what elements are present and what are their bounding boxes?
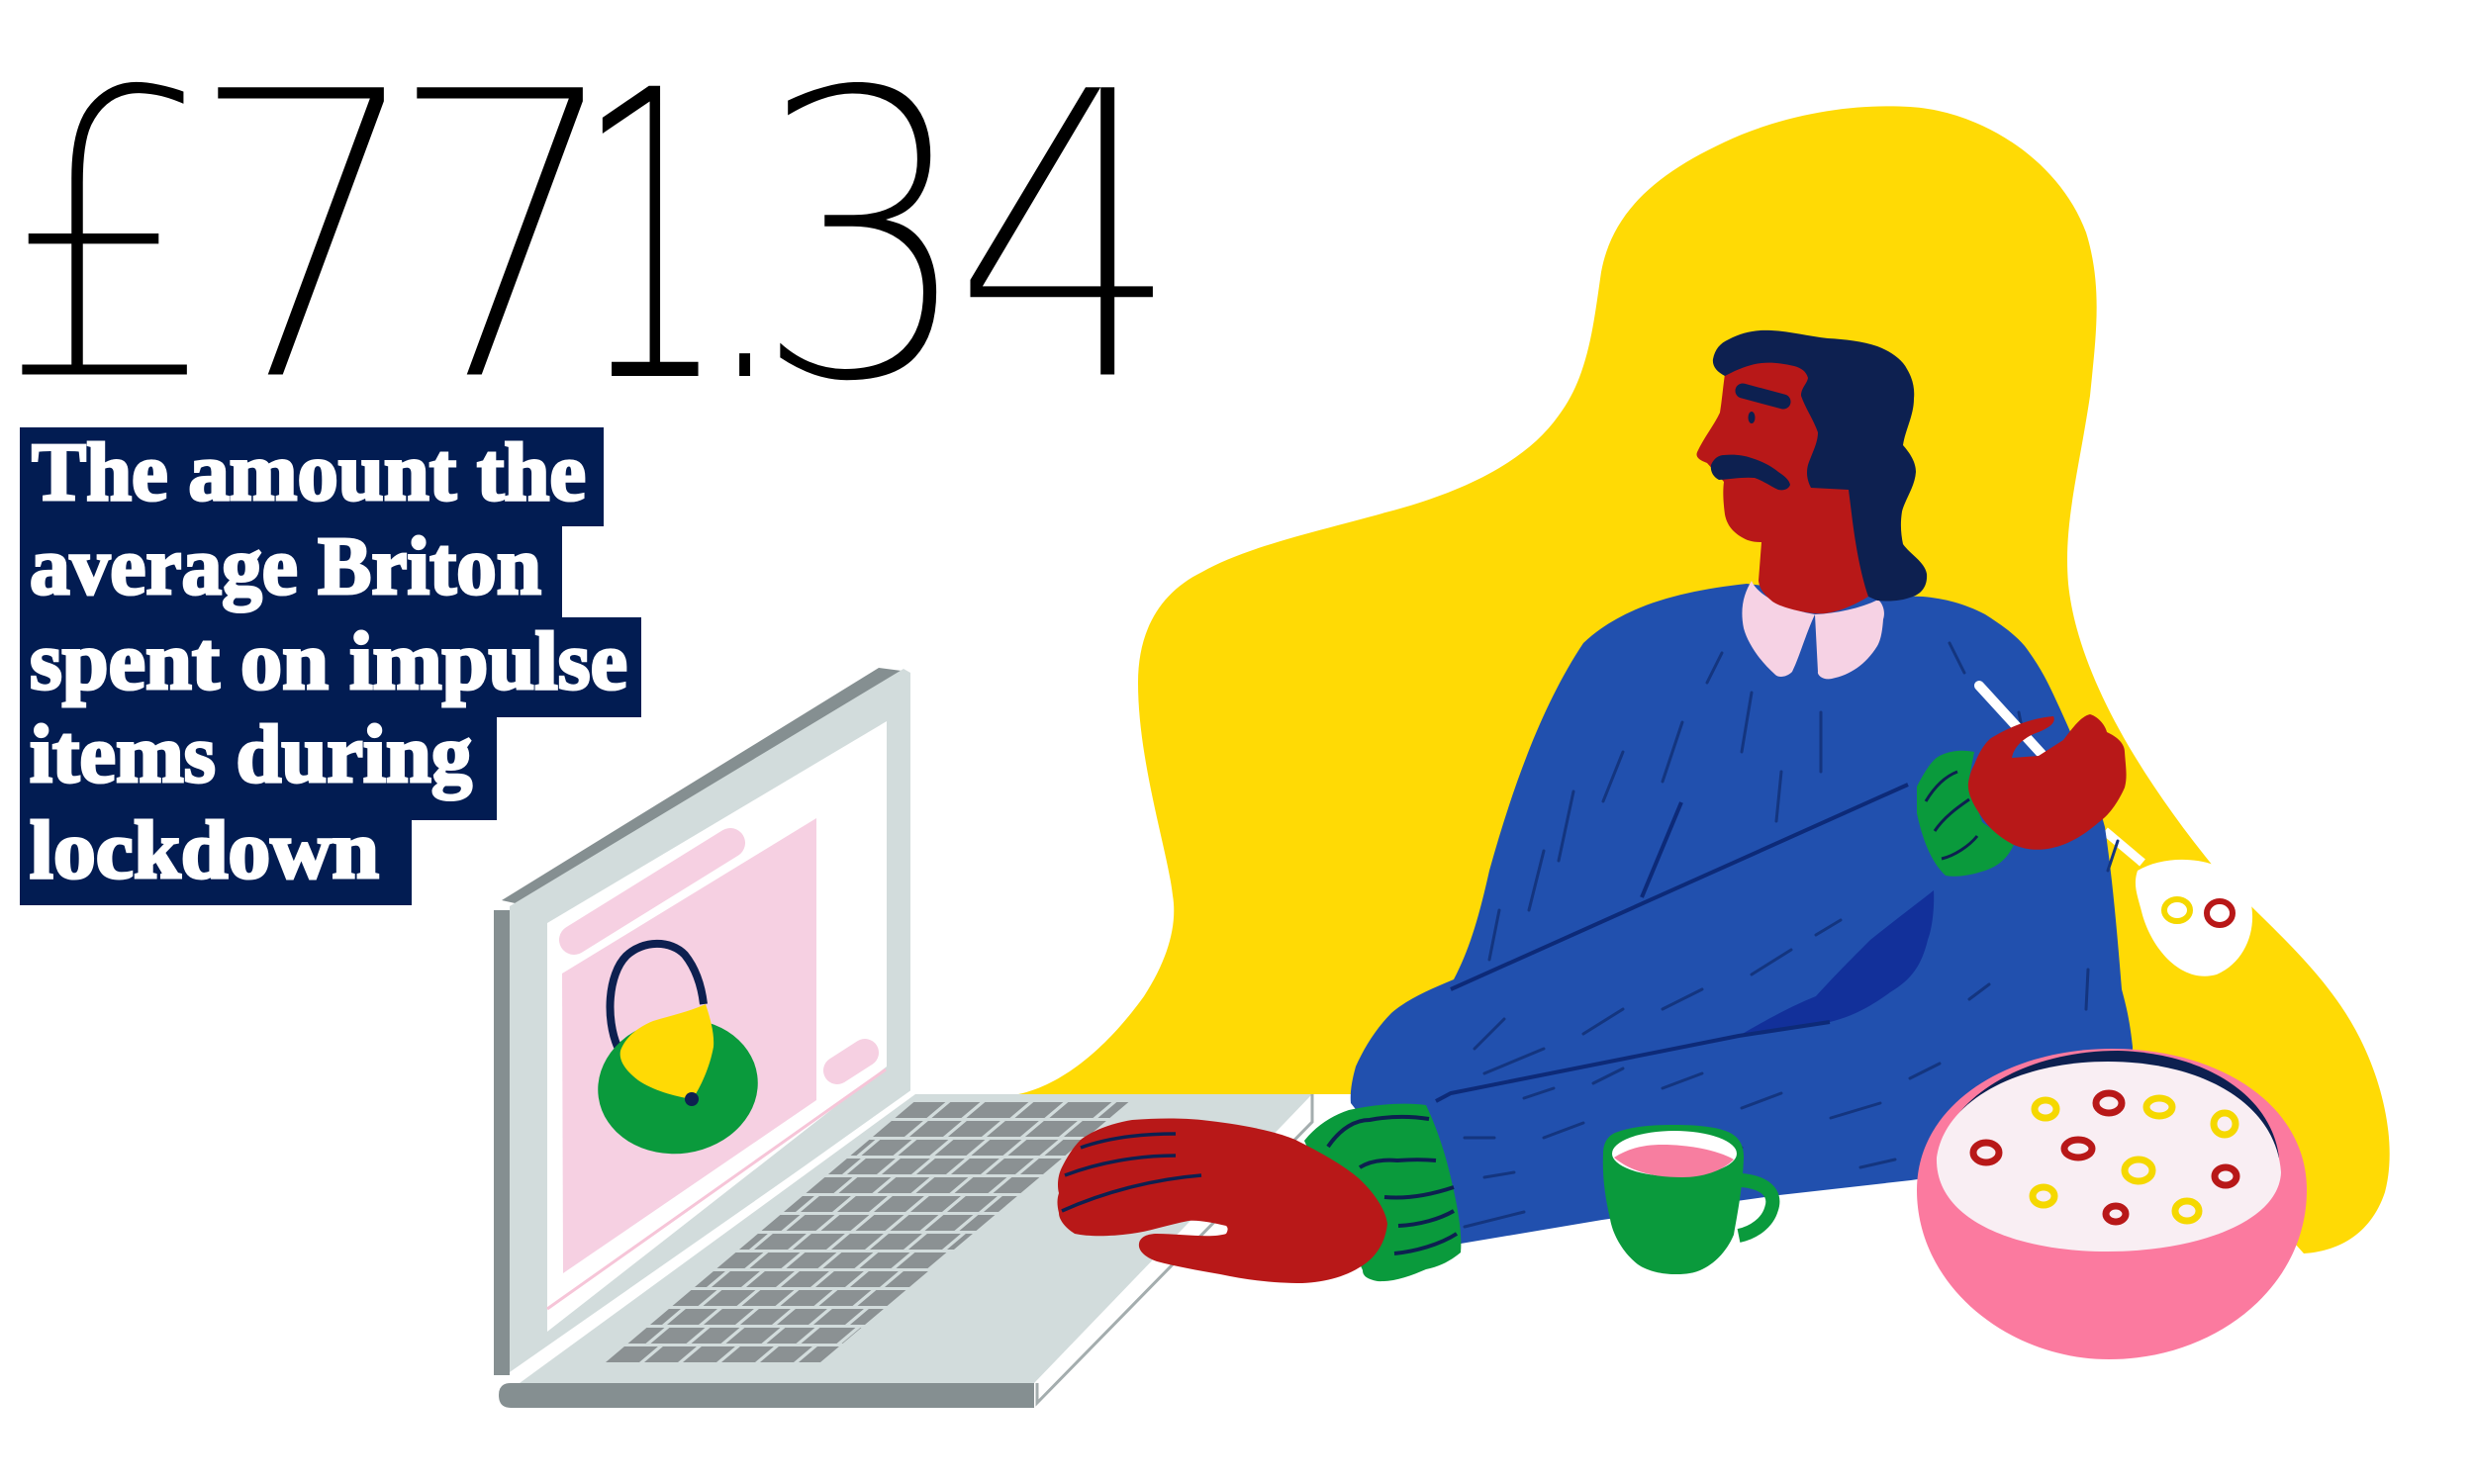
mug drink — [1614, 1145, 1734, 1177]
title: big amount: 1 — [576, 5, 726, 472]
mug opening — [1612, 1131, 1737, 1176]
hair — [1713, 330, 1927, 602]
bag handle — [611, 944, 704, 1047]
yellow background blob — [1018, 106, 2390, 1253]
bag clasp — [685, 1092, 699, 1106]
spoon bowl — [2136, 860, 2252, 976]
yellow cereal rings — [2033, 1098, 2236, 1221]
title: big amount: 7 — [383, 5, 627, 472]
sweater pocket shadow — [1739, 890, 1934, 1036]
page footer line — [547, 1069, 886, 1309]
title: big amount: £ — [0, 5, 220, 472]
red cereal on spoon — [2207, 901, 2233, 925]
laptop hinge gap — [513, 1092, 912, 1377]
finger lines — [1062, 1134, 1201, 1211]
bag body — [589, 1008, 767, 1164]
caption text: spent on impulse — [30, 615, 627, 707]
title: big amount — [0, 5, 1185, 472]
caption text: items during — [30, 708, 472, 800]
left hand — [1057, 1118, 1387, 1283]
mug body — [1603, 1125, 1744, 1274]
title: big amount: 4 — [950, 5, 1185, 472]
collar — [1742, 581, 1884, 679]
yellow cereal on spoon — [2164, 899, 2190, 921]
spoon stick — [1979, 686, 2042, 754]
collar left flap — [1742, 581, 1815, 677]
caption highlight bars — [20, 427, 641, 905]
right hand — [1968, 714, 2127, 850]
person — [1057, 330, 2133, 1283]
bag flap — [620, 1004, 714, 1099]
right cuff lines — [1926, 772, 1977, 859]
caption block — [20, 426, 641, 905]
sweater — [1351, 584, 2133, 1244]
laptop front edge — [499, 1383, 1034, 1408]
page header pill — [574, 843, 730, 940]
eyebrow — [1743, 391, 1783, 402]
icon: laptop — [494, 668, 1312, 1408]
left sleeve cuff — [1304, 1104, 1461, 1281]
red cereal rings — [1973, 1093, 2236, 1222]
icon: mug — [1603, 1125, 1772, 1274]
laptop side — [1037, 1094, 1312, 1403]
title: big amount: 3 — [751, 5, 976, 472]
sweater arm lines — [1436, 785, 1908, 1101]
caption text: The amount the — [32, 426, 586, 518]
caption text: average Briton — [30, 520, 541, 612]
keyboard — [615, 1110, 1119, 1354]
web page panel — [562, 818, 816, 1273]
icon: handbag — [589, 944, 767, 1164]
title: big amount: . — [707, 5, 783, 472]
laptop screen — [547, 721, 887, 1332]
icon: cereal bowl — [1917, 1049, 2307, 1359]
title: big amount: 7 — [184, 5, 428, 472]
milk — [1937, 1062, 2281, 1252]
bowl body — [1917, 1049, 2307, 1359]
face and neck — [1696, 356, 1868, 613]
moustache — [1711, 455, 1790, 490]
spoon handle end — [2105, 831, 2142, 863]
collar right flap — [1815, 600, 1884, 679]
laptop screen bezel — [510, 669, 910, 1372]
laptop top edge — [502, 668, 902, 904]
laptop left edge — [494, 910, 510, 1375]
eye — [1748, 412, 1756, 423]
left cuff lines — [1328, 1117, 1457, 1253]
mug handle — [1739, 1180, 1772, 1236]
caption text — [30, 426, 627, 896]
laptop deck — [520, 1094, 1312, 1383]
sweater texture — [1465, 643, 2118, 1227]
caption text: lockdown — [30, 804, 379, 896]
right sleeve cuff — [1917, 751, 2014, 877]
icon: spoon head — [2105, 831, 2252, 976]
bowl inner rim — [1940, 1051, 2279, 1158]
page button pill — [837, 1053, 865, 1070]
